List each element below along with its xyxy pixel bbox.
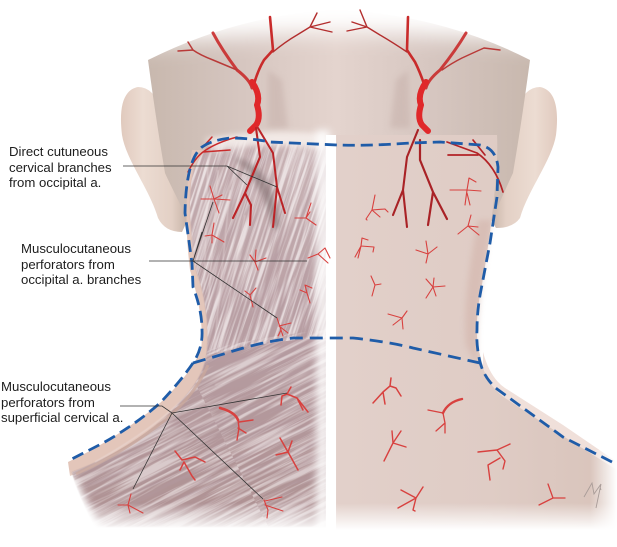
right shoulder fade <box>590 450 617 540</box>
upper fibre texture: light <box>190 141 326 355</box>
lower fibre texture: light <box>72 330 326 527</box>
dark upper fold <box>232 158 280 229</box>
label: occipital musculocutaneous perforators: occipital a. branches <box>21 272 142 287</box>
bottom fade <box>40 503 617 530</box>
head top fade <box>0 0 617 60</box>
upper fibre texture: dark <box>190 141 326 355</box>
skin: right neck and shoulder <box>336 135 617 530</box>
skin band: left neck <box>68 150 210 476</box>
lower fibre texture: dark <box>72 330 326 527</box>
label: occipital cutaneous branches: cervical branches <box>9 160 112 175</box>
skull left <box>148 10 337 218</box>
arteries: left occipital trunk <box>178 13 332 227</box>
label: occipital musculocutaneous perforators: Musculocutaneous <box>21 241 131 256</box>
muscle base <box>72 141 326 527</box>
label: occipital cutaneous branches: Direct cutuneous <box>9 144 108 159</box>
label: superficial cervical perforators: superficial cervical a. <box>1 410 123 425</box>
neck muscle hints <box>268 70 410 128</box>
left ear <box>121 87 190 232</box>
left shoulder fade <box>55 478 105 535</box>
artery: right direct cutaneous branch <box>447 140 503 192</box>
label: occipital musculocutaneous perforators: perforators from <box>21 257 115 272</box>
label: superficial cervical perforators: perforators from <box>1 395 95 410</box>
perforators: right side <box>355 178 565 511</box>
muscle panel <box>72 141 326 527</box>
artery: left direct cutaneous branch <box>188 137 237 172</box>
leader lines <box>120 166 307 499</box>
arteries: right occipital trunk <box>347 10 503 227</box>
blue dashed flap outline <box>70 138 612 462</box>
skin: right neck side shadow <box>465 220 492 368</box>
icon: artist signature <box>584 483 601 508</box>
white glow above muscle <box>205 132 326 152</box>
perforators: left side <box>118 186 330 518</box>
skull right <box>336 10 530 218</box>
bottom clear <box>40 530 617 547</box>
pale band along right shoulder <box>483 352 617 470</box>
label: occipital cutaneous branches: from occipital a. <box>9 175 101 190</box>
label: superficial cervical perforators: Musculocutaneous <box>1 379 111 394</box>
lateral light fibres <box>95 160 326 462</box>
right ear <box>488 87 557 228</box>
feathered muscle edge and centre stripe <box>316 130 336 540</box>
shoulder crease <box>76 365 208 474</box>
lower dashed boundary <box>193 338 480 363</box>
